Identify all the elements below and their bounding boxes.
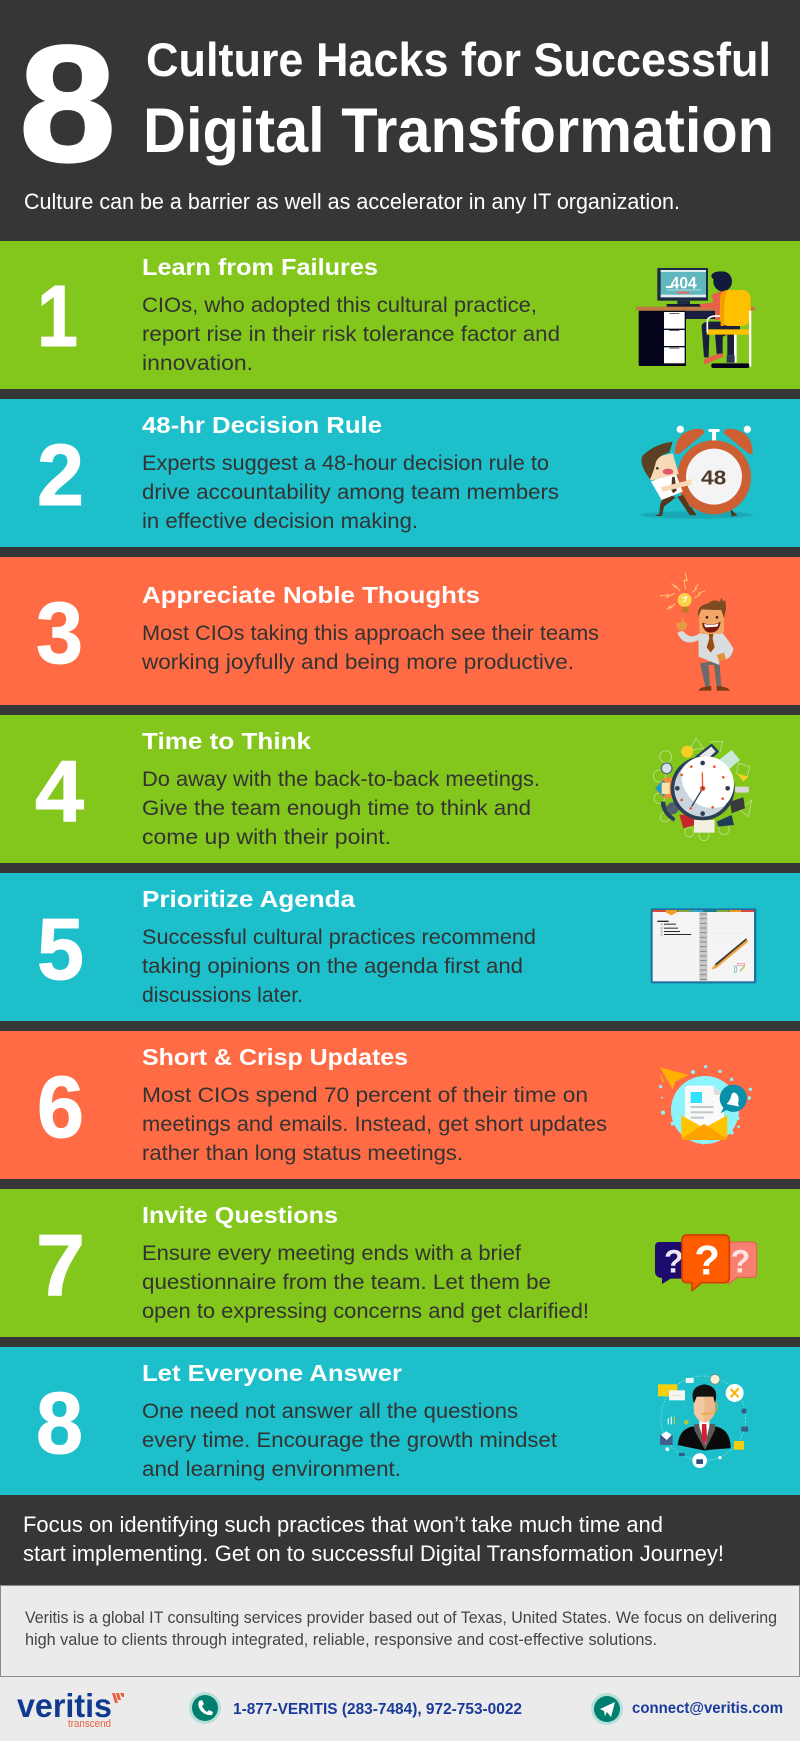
number 8: 8 — [36, 1375, 83, 1472]
panel: 3 appreciate noble thoughts — [0, 557, 800, 705]
heading: Invite Questions — [142, 1202, 338, 1228]
panel: 7 invite questions — [0, 1189, 800, 1337]
body text: Do away with the back-to-back meetings. — [142, 767, 540, 791]
body text: and learning environment. — [142, 1457, 401, 1481]
body text: meetings and emails. Instead, get short updates — [142, 1112, 607, 1136]
body text: every time. Encourage the growth mindset — [142, 1428, 557, 1452]
body text: Most CIOs taking this approach see their teams — [142, 621, 599, 645]
panel: 1 learn from failures — [0, 241, 800, 389]
body text: Successful cultural practices recommend — [142, 925, 536, 949]
heading: 48-hr Decision Rule — [142, 412, 382, 438]
number 4: 4 — [35, 743, 84, 840]
logo: veritis transcend: transcend — [68, 1718, 111, 1730]
heading: Time to Think — [142, 728, 311, 754]
email contact — [591, 1693, 783, 1725]
body text: rather than long status meetings. — [142, 1141, 463, 1165]
title line 1: Culture Hacks for Successful — [146, 33, 771, 86]
number 7: 7 — [36, 1217, 85, 1314]
body text — [142, 1083, 607, 1165]
icon: person at desk with 404 screen: 404 — [671, 273, 697, 292]
panel: 8 let everyone answer — [0, 1347, 800, 1495]
panel: 5 prioritize agenda — [0, 873, 800, 1021]
body text: taking opinions on the agenda first and — [142, 954, 523, 978]
icon: phone — [189, 1692, 221, 1724]
body text: open to expressing concerns and get clarified! — [142, 1299, 589, 1323]
heading: Short & Crisp Updates — [142, 1044, 408, 1070]
icon: man with light bulb idea — [660, 573, 733, 691]
icon: man pushing alarm clock 48 — [641, 426, 753, 519]
icon: question mark speech bubbles — [655, 1235, 757, 1291]
footer background — [0, 1585, 800, 1741]
icon: open notebook with pencil — [651, 908, 756, 983]
body text — [142, 925, 536, 1007]
number 3: 3 — [36, 585, 83, 682]
email address: connect@veritis.com — [632, 1700, 783, 1717]
panel: 6 short and crisp updates — [0, 1031, 800, 1179]
body text: innovation. — [142, 351, 253, 375]
body text — [142, 451, 559, 533]
about box: high value to clients through integrated, reliable, responsive and cost-effective solutions. — [25, 1631, 657, 1649]
body text: CIOs, who adopted this cultural practice, — [142, 293, 537, 317]
body text: Experts suggest a 48-hour decision rule to — [142, 451, 549, 475]
body text: come up with their point. — [142, 825, 391, 849]
header — [19, 12, 774, 214]
phone contact — [189, 1692, 522, 1724]
icon: question mark speech bubbles: ? — [731, 1244, 750, 1280]
closing message: Focus on identifying such practices that won’t take much time and — [23, 1512, 663, 1537]
heading: Let Everyone Answer — [142, 1360, 402, 1386]
panel: 4 time to think — [0, 715, 800, 863]
body text — [142, 1241, 589, 1323]
closing message — [23, 1512, 724, 1566]
body text: Ensure every meeting ends with a brief — [142, 1241, 521, 1265]
heading: Prioritize Agenda — [142, 886, 355, 912]
icon: person at desk with 404 screen — [636, 268, 755, 368]
body text: discussions later. — [142, 983, 303, 1007]
body text — [142, 1399, 557, 1481]
subtitle: Culture can be a barrier as well as accelerator in any IT organization. — [24, 189, 680, 214]
body text: in effective decision making. — [142, 509, 418, 533]
body text: questionnaire from the team. Let them be — [142, 1270, 551, 1294]
icon: paper plane — [591, 1693, 623, 1725]
body text: Most CIOs spend 70 percent of their time on — [142, 1083, 588, 1107]
icon: question mark speech bubbles: ? — [694, 1237, 720, 1284]
heading: Appreciate Noble Thoughts — [142, 582, 480, 608]
icon: clock with work objects — [653, 738, 752, 841]
closing message: start implementing. Get on to successful Digital Transformation Journey! — [23, 1541, 724, 1566]
big numeral 8: 8 — [19, 12, 116, 197]
body text: working joyfully and being more productive. — [141, 650, 574, 674]
logo: veritis transcend: veritis — [17, 1687, 112, 1724]
body text: One need not answer all the questions — [142, 1399, 518, 1423]
number 2: 2 — [37, 427, 84, 524]
icon: question mark speech bubbles: ? — [664, 1244, 684, 1280]
about box: Veritis is a global IT consulting services provider based out of Texas, United States. We focus on delivering — [25, 1609, 777, 1627]
number 6: 6 — [37, 1059, 84, 1156]
panel: 2 48-hr decision rule — [0, 399, 800, 547]
icon: support agent with service icons — [658, 1374, 748, 1468]
number 1: 1 — [37, 268, 78, 365]
phone numbers: 1-877-VERITIS (283-7484), 972-753-0022 — [233, 1701, 522, 1718]
body text: drive accountability among team members — [142, 480, 559, 504]
number 5: 5 — [37, 901, 84, 998]
body text: report rise in their risk tolerance factor and — [142, 322, 560, 346]
icon: envelope, paper plane and bell — [659, 1065, 752, 1145]
heading: Learn from Failures — [142, 254, 378, 280]
body text — [142, 767, 540, 849]
body text — [142, 293, 560, 375]
body text: Give the team enough time to think and — [142, 796, 531, 820]
title line 2: Digital Transformation — [143, 96, 774, 166]
about box — [0, 1586, 800, 1676]
body text — [141, 621, 599, 674]
icon: man pushing alarm clock 48: 48 — [701, 467, 726, 489]
